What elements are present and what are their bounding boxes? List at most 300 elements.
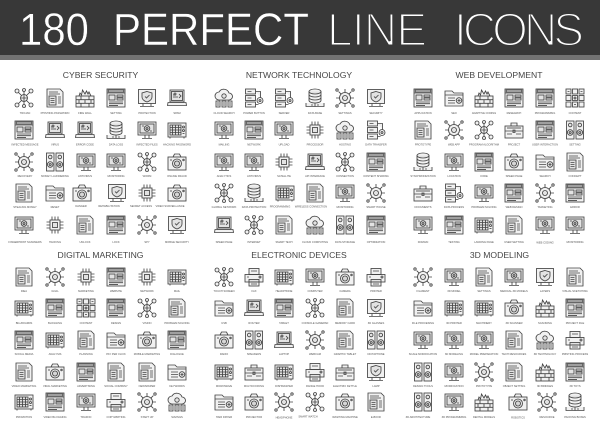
- icon: robotics: ROBOTICS: [511, 416, 525, 420]
- icon: online fraud: [167, 154, 187, 178]
- icon: goal: GOAL: [51, 289, 59, 293]
- icon: content: [566, 89, 584, 115]
- icon: security: SECURITY: [369, 111, 383, 115]
- icon: layers: LAYERS: [540, 289, 550, 293]
- icon: project file: PROJECT FILE: [566, 321, 585, 325]
- icon: tech resources: [502, 331, 527, 356]
- icon: secret access: SECRET ACCESS: [130, 204, 152, 208]
- icon: visual sketching: [562, 268, 588, 293]
- icon: seo: SEO: [451, 111, 457, 115]
- icon: mobile marketing: MOBILE MARKETING: [134, 352, 160, 356]
- icon: smart house: [366, 184, 386, 209]
- icon: scanning: [536, 300, 554, 325]
- icon: mailing: MAILING: [219, 142, 229, 146]
- icon: projector: [245, 394, 263, 419]
- icon: monitoring: MONITORING: [336, 205, 354, 209]
- icon: data storage: [335, 216, 355, 244]
- icon: server: SERVER: [279, 111, 289, 115]
- icon: file processing: FILE PROCESING: [412, 321, 434, 325]
- icon: search: SEARCH: [539, 174, 551, 178]
- icon: virus: [46, 122, 64, 146]
- icon: vision: VISION: [143, 321, 152, 325]
- icon: setting: SETTING: [110, 111, 122, 115]
- icon: application: APPLICATION: [414, 111, 432, 115]
- icon: spy: SPY: [144, 240, 150, 244]
- icon: power button: POWER BUTTON: [243, 111, 265, 115]
- icon: projector: PROJECTOR: [246, 415, 262, 419]
- icon: lamp: [368, 364, 384, 388]
- icon: touch screen: [213, 268, 235, 293]
- icon: cloud computing: CLOUD COMPUTING: [302, 240, 328, 244]
- icon: object setting: [503, 363, 525, 388]
- icon: trojan: [15, 88, 33, 115]
- icon: problem solving: PROBLEM SOLVING: [164, 321, 190, 325]
- icon: prototype: PROTOTYPE: [415, 142, 431, 146]
- icon: network: NETWORK: [247, 142, 261, 146]
- icon: 3d glasses: 3D GLASSES: [368, 321, 384, 325]
- icon: range hood: [306, 364, 324, 388]
- icon: washing machine: WASHING MACHINE: [332, 415, 358, 419]
- icon: copywriting: COPYWRITING: [107, 415, 125, 419]
- icon: program algorithm: [469, 120, 499, 146]
- icon: visual sketching: VISUAL SKETCHING: [562, 289, 588, 293]
- icon: start up: START UP: [141, 415, 154, 419]
- icon: tablet: TABLET: [279, 321, 289, 325]
- icon: smart tech: [275, 216, 293, 244]
- icon: satellite: SATELLITE: [277, 174, 291, 178]
- icon: traffic: [77, 394, 95, 419]
- icon: api interface: [305, 154, 325, 178]
- icon: phishing password: [41, 89, 69, 115]
- icon: dictaphone: [367, 331, 385, 356]
- icon: radio: [215, 332, 233, 356]
- icon: scale modification: SCALE MODIFICATION: [409, 352, 437, 356]
- icon: protection: [138, 90, 156, 115]
- icon: console gamepad: [302, 298, 328, 325]
- heading: line icons: [327, 4, 584, 56]
- icon: range hood: RANGE HOOD: [306, 384, 324, 388]
- icon: infected files: [136, 122, 158, 146]
- icon: upload: UPLOAD: [279, 142, 290, 146]
- icon: data base: DATA BASE: [308, 111, 322, 115]
- icon: error: ERROR: [570, 205, 580, 209]
- heading: 180 perfect: [19, 4, 309, 55]
- icon: headphone: HEADPHONE: [276, 416, 293, 420]
- icon: spam: [168, 90, 186, 115]
- icon: multicooker: MULTICOOKING: [244, 384, 264, 388]
- icon: object setting: OBJECT SETTING: [503, 384, 525, 388]
- icon: dishwasher: [275, 365, 293, 388]
- icon: video marketing: VIDEO MARKETING: [12, 384, 36, 388]
- icon: code: CODE: [480, 174, 488, 178]
- icon: settings: [476, 268, 492, 293]
- heading: web development: WEB DEVELOPMENT: [456, 70, 543, 80]
- icon: 3d scanner: 3D SCANNER: [505, 321, 523, 325]
- icon: security: [368, 90, 384, 115]
- icon: data process: [444, 184, 464, 209]
- icon: e-book: [368, 393, 384, 419]
- icon: trojan: TROJAN: [20, 111, 30, 115]
- icon: start up: [138, 393, 156, 419]
- icon: newspaper: NEWSPAPER: [139, 384, 155, 388]
- icon: copywriting: [107, 394, 125, 419]
- icon: router: [244, 300, 264, 325]
- icon: antivirus: [245, 154, 263, 178]
- icon: prototype: [415, 121, 431, 146]
- icon: project: PROJECT: [508, 142, 521, 146]
- icon: problem solving: [471, 185, 497, 209]
- icon: filament: [414, 268, 432, 293]
- icon: 3d bridges: 3D BRIDGES: [537, 384, 553, 388]
- icon: 3d programming: 3D PROGRAMMING: [442, 415, 466, 419]
- icon: data protection: [242, 184, 266, 209]
- icon: dental models: [473, 394, 495, 419]
- icon: power button: [243, 89, 265, 115]
- panel: cyber security: [8, 70, 191, 244]
- icon: analysis: [46, 333, 64, 356]
- icon: analytics: ANALYTICS: [217, 174, 231, 178]
- icon: video marketing: [12, 363, 36, 388]
- panel: network technology: [212, 70, 389, 244]
- icon: programming: PROGRAMMING: [270, 204, 290, 208]
- icon: error: [566, 184, 584, 209]
- icon: medical 3d models: MEDICAL 3D MODELS: [500, 289, 528, 293]
- icon: speed page: [214, 217, 234, 244]
- icon: traffic: TRAFFIC: [80, 415, 92, 419]
- icon: adaptive coding: [472, 90, 496, 115]
- icon: video surveillance: [155, 185, 186, 208]
- icon: usb: [215, 301, 233, 325]
- icon: wireless connection: [295, 184, 327, 208]
- icon: dental models: DENTAL MODELS: [473, 415, 495, 419]
- icon: mobile security: MOBILE SECURITY: [165, 240, 189, 244]
- icon: microwave: MICROWAVE: [216, 384, 232, 388]
- icon: optimization: OPTIMIZATION: [367, 240, 385, 244]
- icon: testing: [445, 216, 463, 244]
- icon: content: CONTENT: [80, 321, 93, 325]
- icon: web app: [445, 121, 463, 146]
- heading: digital marketing: DIGITAL MARKETING: [58, 250, 144, 260]
- icon: 3d programming: [442, 394, 466, 419]
- icon: hair dryer: [215, 395, 233, 419]
- icon: keywords: [168, 365, 186, 388]
- icon: setting: [566, 121, 584, 146]
- icon: radio: RADIO: [220, 352, 228, 356]
- icon: problem solving: [164, 299, 190, 325]
- icon: viral marketing: [43, 364, 67, 388]
- icon: 3d bridges: [536, 364, 554, 388]
- icon: reset: [46, 186, 64, 209]
- icon: data base: [306, 89, 324, 115]
- icon: global network: GLOBAL NETWORK: [212, 205, 237, 209]
- icon: synchronization: SYNCHRONIZATION: [410, 174, 436, 178]
- icon: setting: SETTING: [569, 142, 581, 146]
- icon: robotics: [509, 394, 527, 420]
- icon: social media: SOCIAL MEDIA: [15, 352, 34, 356]
- icon: graphic tablet: [334, 331, 357, 356]
- icon: data transfer: [365, 121, 387, 146]
- icon: data loss: DATA LOSS: [109, 142, 123, 146]
- icon: settings: SETTINGS: [477, 289, 491, 293]
- icon: speakers: SPEAKERS: [247, 352, 261, 356]
- icon: hosting: [336, 121, 354, 146]
- icon: landing page: LANDING PAGE: [474, 240, 494, 244]
- icon: program algorithm: PROGRAM ALGORITHM: [469, 142, 499, 146]
- icon: internet: [245, 216, 263, 244]
- icon: marketing: MARKETING: [78, 289, 94, 293]
- icon: prototype: PROTOTYPE: [476, 384, 492, 388]
- icon: network: [245, 121, 263, 146]
- icon: spy: [138, 216, 156, 244]
- icon: 3d toys: [566, 363, 584, 388]
- icon: antivirus: [77, 154, 95, 178]
- icon: monitoring: MONITORING: [107, 174, 125, 178]
- icon: design tools: [413, 363, 433, 388]
- icon: layers: [536, 268, 554, 293]
- icon: modification: MODIFICATION: [444, 384, 464, 388]
- icon: error code: [76, 122, 94, 146]
- icon: mail: MAIL: [174, 289, 181, 293]
- icon: documents: DOCUMENTS: [414, 205, 432, 209]
- icon: project file: [566, 299, 585, 325]
- icon: speed page: SPEED PAGE: [506, 174, 523, 178]
- icon: monitoring: MONITORING: [566, 240, 584, 244]
- icon: social company: [104, 363, 128, 388]
- icon: 3d glasses: [368, 300, 384, 325]
- icon: programming: [270, 186, 294, 208]
- icon: 3d model: [445, 269, 463, 293]
- heading: cyber security: CYBER SECURITY: [63, 70, 138, 80]
- icon: location: LOCATION: [447, 174, 461, 178]
- icon: money laundering: [41, 153, 69, 178]
- icon: 3d toys: 3D TOYS: [569, 384, 581, 388]
- icon: programming: PROGRAMMING: [535, 111, 555, 115]
- icon: 3d technology: [534, 331, 557, 356]
- icon: hacking password: [163, 123, 191, 146]
- icon: web design: [505, 184, 523, 209]
- icon: pay per click: PAY PER CLICK: [106, 352, 126, 356]
- icon: scanning: SCANNING: [538, 321, 552, 325]
- icon: 3d modeling: [445, 332, 463, 356]
- icon: packing boxes: [564, 393, 586, 419]
- icon: usb: USB: [221, 321, 227, 325]
- icon: user interaction: [532, 121, 558, 146]
- icon: filament: FILAMENT: [416, 289, 430, 293]
- icon: rehabilitation: REHABILITATION: [98, 204, 120, 208]
- icon: video surveillance: VIDEO SURVEILLANCE: [155, 204, 185, 208]
- icon: programming: [535, 89, 555, 115]
- icon: smart house: SMART HOUSE: [366, 205, 386, 209]
- icon: keywords: KEYWORDS: [169, 384, 185, 388]
- icon: content sharing: CONTENT SHARING: [363, 174, 389, 178]
- icon: touch screen: TOUCH SCREEN: [213, 289, 235, 293]
- icon: printing process: PRINTING PROCESS: [562, 352, 588, 356]
- icon: synchronization: [410, 153, 436, 178]
- icon: domain: [414, 217, 432, 244]
- icon: domain: DOMAIN: [418, 240, 428, 244]
- icon: microwave: [215, 365, 233, 388]
- icon: smart tech: SMART TECH: [275, 240, 293, 244]
- icon: online fraud: ONLINE FRAUD: [167, 174, 187, 178]
- icon: speed page: SPEED PAGE: [216, 240, 233, 244]
- icon: worm: WORM: [143, 174, 151, 178]
- icon: lamp: LAMP: [372, 384, 380, 388]
- icon: design: [107, 299, 125, 325]
- icon: speed page: [505, 154, 523, 178]
- icon: laptop: [274, 332, 294, 356]
- icon: model preparation: [470, 332, 498, 356]
- icon: processor: [306, 122, 324, 146]
- icon: hacking password: HACKING PASSWORD: [163, 142, 191, 146]
- icon: user setting: [504, 216, 524, 244]
- icon: mobile security: [165, 216, 189, 244]
- icon: 3d technology: 3D TECHNOLOGY: [534, 352, 557, 356]
- icon: dishwasher: DISHWASHER: [275, 384, 293, 388]
- icon: protection: PROTECTION: [138, 111, 156, 115]
- icon: infected message: [12, 121, 39, 146]
- panel: web development: [410, 70, 584, 244]
- header banner: [0, 0, 600, 60]
- icon: code: [475, 153, 493, 178]
- icon: fax: [245, 268, 263, 293]
- icon: scale modification: [409, 332, 437, 356]
- icon: network: NETWORK: [140, 289, 154, 293]
- icon: 3d printer: 3D PRINTER: [446, 321, 462, 325]
- icon: design tools: DESIGN TOOLS: [413, 384, 433, 388]
- icon: printer: PRINTER: [370, 289, 382, 293]
- icon: data loss: [107, 121, 125, 146]
- icon: concept: CONCEPT: [569, 174, 582, 178]
- icon: video blogging: [43, 393, 67, 419]
- icon: washing machine: [332, 394, 358, 419]
- icon: virus: VIRUS: [51, 142, 59, 146]
- icon: monitoring: [107, 154, 125, 178]
- icon: 3d scanner: [505, 300, 523, 325]
- icon: connection: CONNECTION: [336, 174, 354, 178]
- icon: blogging: BLOGGING: [48, 321, 62, 325]
- panel: 3d modeling: [406, 250, 588, 420]
- icon: internet: INTERNET: [247, 240, 261, 244]
- icon: optimization: [367, 216, 385, 244]
- icon: newspaper: [139, 363, 155, 388]
- icon: web coding: [536, 217, 554, 244]
- icon: billboard: [15, 301, 33, 325]
- icon: data protection: DATA PROTECTION: [242, 205, 266, 209]
- icon: connection: [336, 152, 354, 178]
- icon: dialogue: DIALOGUE: [170, 352, 184, 356]
- panel: electronic devices: [213, 250, 385, 420]
- icon: infected files: INFECTED FILES: [136, 142, 158, 146]
- icon: camera: [336, 269, 354, 293]
- icon: 3d model: 3D MODEL: [447, 289, 461, 293]
- icon: graphic tablet: GRAPHIC TABLET: [334, 352, 357, 356]
- icon: promotion: PROMOTION: [16, 415, 32, 419]
- icon: computer: COMPUTER: [307, 289, 323, 293]
- icon: packing boxes: PACKING BOXES: [564, 415, 586, 419]
- icon: wireless connection: WIRELESS CONNECTION: [295, 204, 327, 208]
- icon: monitoring: [566, 217, 584, 244]
- icon: fire wall: FIRE WALL: [78, 111, 92, 115]
- icon: error code: ERROR CODE: [76, 142, 94, 146]
- icon: recovery: [15, 153, 33, 178]
- icon: phishing password: PHISHING PASSWORD: [41, 111, 69, 115]
- icon: money laundering: MONEY LAUNDERING: [41, 174, 69, 178]
- icon: application: [414, 89, 432, 115]
- icon: stealing money: [13, 184, 37, 209]
- icon: savings: SAVINGS: [171, 415, 183, 419]
- icon: data transfer: DATA TRANSFER: [365, 142, 387, 146]
- icon: resource: RESOURCE: [540, 415, 555, 419]
- icon: web design: WEB DESIGN: [506, 205, 523, 209]
- icon: advertising: ADVERTISING: [77, 384, 95, 388]
- icon: 3d architecture: [406, 393, 432, 419]
- heading: line icons: LINE: [327, 4, 427, 56]
- icon: unlock: [77, 216, 93, 244]
- icon: targeting: [536, 184, 554, 209]
- icon: content: [77, 299, 95, 325]
- icon: unlock: UNLOCK: [79, 240, 91, 244]
- icon: smart watch: SMART WATCH: [298, 414, 318, 418]
- icon: vision: [138, 298, 156, 325]
- icon: resource: [538, 393, 556, 419]
- icon: pay per click: [106, 333, 126, 356]
- icon: analysis: ANALYSIS: [49, 352, 62, 356]
- icon: goal: [46, 268, 64, 293]
- icon: 3d printer: [445, 301, 463, 325]
- icon: reset: RESET: [51, 205, 60, 209]
- icon: medical 3d models: [500, 269, 528, 293]
- icon: upload: [275, 122, 293, 146]
- icon: laptop: LAPTOP: [279, 352, 289, 356]
- icon: file processing: [412, 301, 434, 325]
- icon: e-book: E-BOOK: [371, 415, 381, 419]
- icon: advertising: [77, 363, 95, 388]
- icon: dictaphone: DICTAPHONE: [367, 352, 385, 356]
- icon: planning: PLANNING: [79, 352, 93, 356]
- icon: modification: [444, 364, 464, 388]
- icon: danger: DANGER: [75, 204, 87, 208]
- icon: computer: [306, 269, 324, 293]
- icon: concept: [567, 153, 583, 178]
- icon: design: DESIGN: [111, 321, 121, 325]
- icon: webcam: [306, 331, 324, 356]
- icon: content sharing: [363, 153, 389, 178]
- icon: testing: TESTING: [448, 240, 460, 244]
- icon: marketing: [78, 268, 94, 293]
- heading: 180 perfect: 180: [19, 4, 89, 55]
- icon: global network: [212, 184, 237, 209]
- icon: worm: [138, 152, 156, 178]
- icon: electric kettle: ELECTRIC KETTLE: [333, 384, 357, 388]
- panel: digital marketing: [12, 250, 190, 419]
- heading: 3d modeling: 3D MODELING: [470, 250, 529, 260]
- icon: idea: IDEA: [21, 289, 27, 293]
- icon: research: RESEARCH: [507, 111, 521, 115]
- icon: fingerprint scanners: FINGERPRINT SCANNERS: [8, 240, 42, 244]
- icon: console gamepad: CONSOLE GAMEPAD: [302, 321, 328, 325]
- icon: satellite: [276, 154, 292, 178]
- icon: 3d architecture: 3D ARCHITECTURE: [406, 415, 431, 419]
- icon: setting: [107, 89, 125, 115]
- icon: search: [536, 155, 554, 178]
- icon: machinery: MACHINERY: [476, 321, 492, 325]
- icon: processor: PROCESSOR: [307, 142, 324, 146]
- icon: dialogue: [168, 331, 186, 356]
- icon: data storage: DATA STORAGE: [335, 240, 355, 244]
- icon: hacking: HACKING: [49, 240, 61, 244]
- icon: seo: [445, 91, 463, 115]
- icon: headphone: HEADPHONE: [276, 289, 293, 293]
